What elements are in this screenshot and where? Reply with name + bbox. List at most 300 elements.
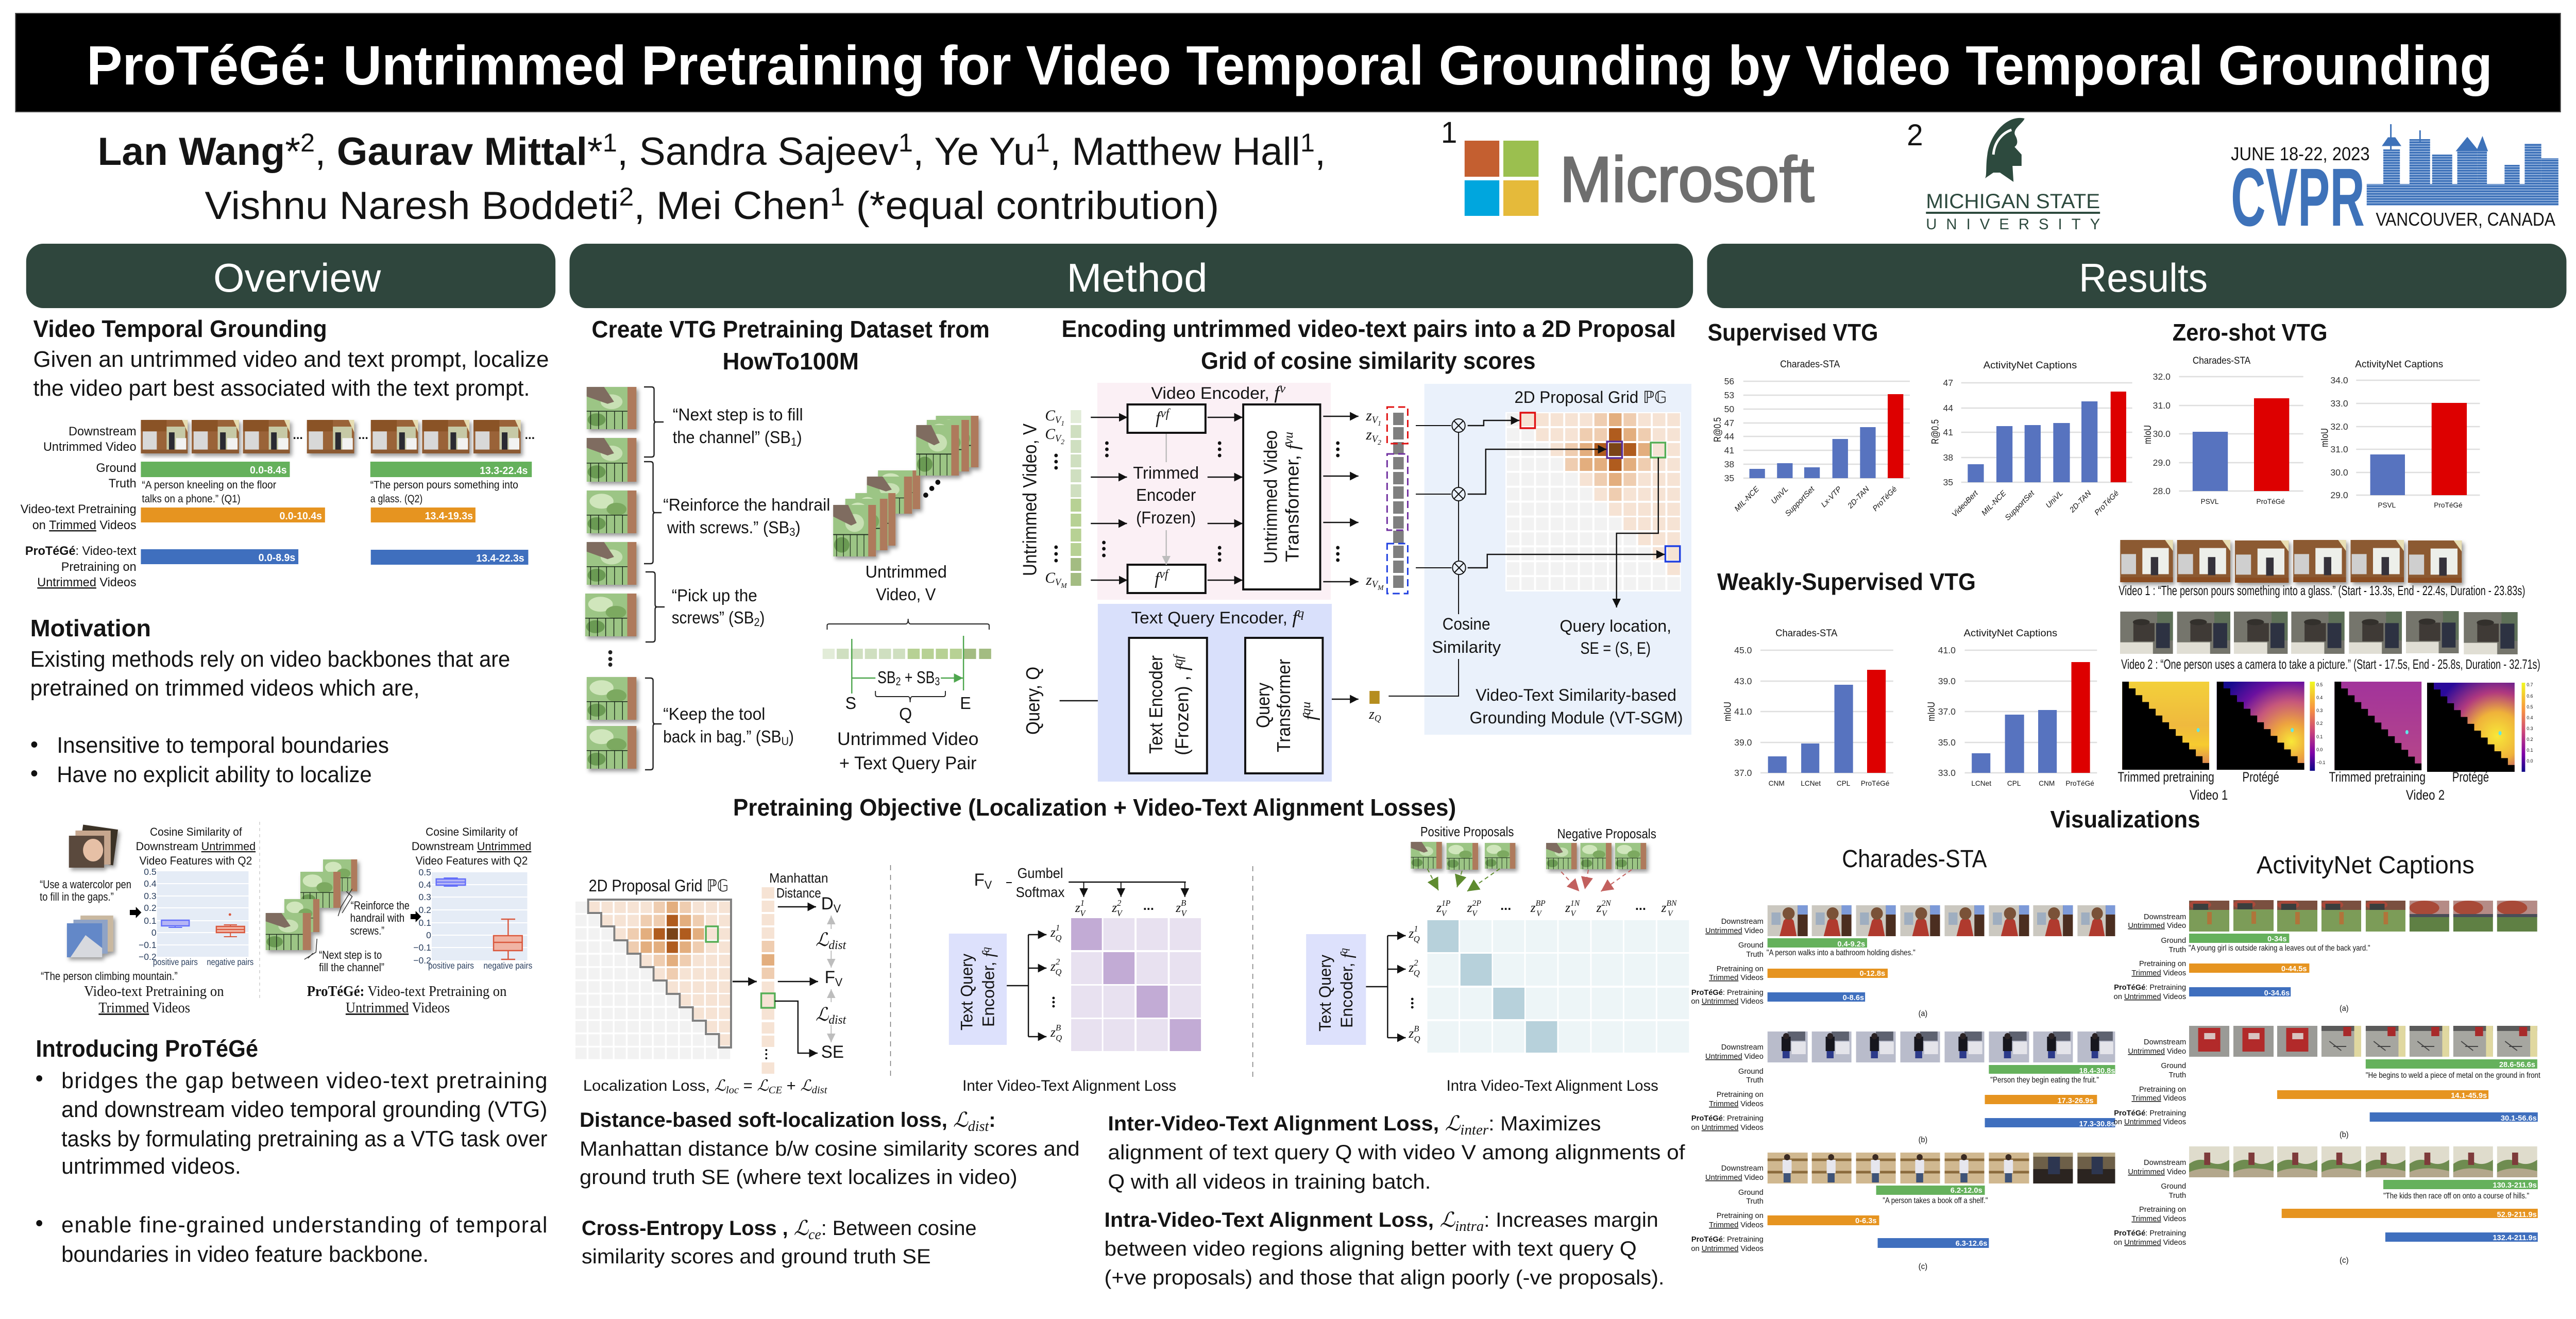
chart: supervised activitynet: R@0.5 <box>1930 419 1941 444</box>
figure: intra video-text alignment: 2P <box>1472 899 1481 908</box>
video features column: V <box>1372 415 1379 426</box>
figure: grounding example: Video-text Pretraining <box>21 503 137 516</box>
panel: results <box>1691 319 2540 1271</box>
text: intra loss: intra <box>1455 1218 1484 1234</box>
input: query: Query, Q <box>1022 667 1043 735</box>
figure: protege pretraining cosine similarity: 0.2 <box>418 905 431 915</box>
figure: intra video-text alignment: V <box>1571 909 1577 918</box>
visualization: charades c: Trimmed Videos <box>1709 1221 1764 1229</box>
logo: Microsoft <box>1441 116 1814 216</box>
figure: protege pretraining cosine similarity: 0 <box>426 930 431 940</box>
captions: step sentences: 2 <box>754 616 760 629</box>
chart: heatmaps: 0.3 <box>2527 726 2533 731</box>
chart: zero-shot activitynet: 31.0 <box>2330 444 2348 454</box>
figure: protege pretraining cosine similarity: handrail with <box>350 911 404 924</box>
figure: localization loss: V <box>834 902 841 915</box>
chart: zero-shot charades: 28.0 <box>2153 486 2171 496</box>
figure: inter video-text alignment: z <box>1050 1025 1056 1040</box>
logo: Michigan State University <box>1907 118 2100 233</box>
figure: inter video-text alignment: 1 <box>1056 923 1060 933</box>
chart: zero-shot charades: 31.0 <box>2153 400 2171 411</box>
start-end span: S <box>845 694 856 713</box>
visualization: activitynet a: Pretraining on <box>2139 960 2186 968</box>
text: vtg description <box>33 347 549 401</box>
panel: text query encoder: Text Query Encoder, f <box>1131 607 1297 628</box>
visualization: charades c: Downstream <box>1721 1164 1764 1173</box>
figure: grounding example: Truth <box>109 477 137 491</box>
logo: Michigan State University: 2 <box>1907 119 1923 152</box>
chart: weakly-supervised activitynet: 35.0 <box>1938 737 1956 748</box>
chart: supervised activitynet: 41 <box>1943 427 1953 437</box>
panel: video encoder: vu <box>1281 432 1296 445</box>
figure: intra video-text alignment: z <box>1597 900 1602 915</box>
visualization: charades c: 6.2-12.0s <box>1951 1187 1982 1195</box>
start-end span: + Text Query Pair <box>839 754 977 773</box>
visualization: charades a: ProTéGé: Pretraining <box>1691 989 1764 997</box>
untrimmed video frame stacks <box>833 416 978 556</box>
visualization: charades b: Ground <box>1738 1068 1764 1076</box>
figure: intra video-text alignment: 1P <box>1442 899 1451 908</box>
video features column: 2 <box>1378 438 1381 446</box>
figure: inter video-text alignment: Inter Video-Text Alignment Loss <box>962 1077 1176 1094</box>
visualization: charades a: Trimmed Videos <box>1709 974 1764 982</box>
start-end span: 2 <box>896 675 901 688</box>
figure: inter video-text alignment: B <box>1181 898 1186 908</box>
label: untrimmed video: Video, V <box>876 585 936 604</box>
heading: create dataset: Create VTG Pretraining Dataset from <box>591 316 990 343</box>
clip strip <box>823 649 991 659</box>
figure: inter video-text alignment: Q <box>1055 967 1061 977</box>
chart: supervised charades: 50 <box>1724 404 1734 414</box>
authors: Gaurav Mittal* <box>337 129 602 173</box>
figure: protege pretraining cosine similarity: −0.2 <box>413 955 431 966</box>
chart: supervised activitynet: 38 <box>1943 452 1953 463</box>
panel: VT-SGM: Grounding Module (VT-SGM) <box>1470 708 1683 727</box>
figure: protege pretraining cosine similarity: fill the channel” <box>319 961 384 974</box>
authors: , <box>1315 129 1326 173</box>
text: motivation: pretrained on trimmed videos which are, <box>30 676 419 701</box>
figure: inter video-text alignment: z <box>1050 925 1056 940</box>
start-end span: 3 <box>935 675 940 688</box>
figure: protege pretraining cosine similarity: positive pairs <box>428 960 474 971</box>
figure: intra video-text alignment: 2N <box>1602 899 1612 908</box>
figure: grounding example: ... <box>525 429 535 442</box>
chart: weakly-supervised charades: Charades-STA <box>1775 628 1838 638</box>
chart: heatmaps: 0.5 <box>2527 704 2533 709</box>
figure: intra video-text alignment: Negative Proposals <box>1557 827 1656 841</box>
text: inter loss <box>1108 1112 1686 1193</box>
video features column <box>1365 407 1408 594</box>
panel: VT-SGM: Query location, <box>1560 617 1671 635</box>
chart: zero-shot activitynet: mIoU <box>2319 428 2330 447</box>
figure: grounding example: 13.3-22.4s <box>480 465 528 477</box>
figure: intra video-text alignment: Q <box>1414 968 1420 978</box>
figure: localization loss: Localization Loss, ℒ <box>583 1077 725 1094</box>
text: intra loss: Intra-Video-Text Alignment Loss, ℒ <box>1105 1209 1454 1231</box>
chart: heatmaps: Trimmed pretraining <box>2117 769 2214 785</box>
chart: supervised activitynet: 44 <box>1943 403 1953 413</box>
figure: localization loss: loc <box>726 1085 739 1096</box>
chart: weakly-supervised charades: CNM <box>1769 779 1785 787</box>
text: vtg description: Given an untrimmed video and text prompt, localize <box>33 347 549 372</box>
chart: heatmaps: 0.2 <box>2316 721 2323 726</box>
figure: intra video-text alignment <box>1306 825 1689 1094</box>
text: cross-entropy loss: ce <box>808 1226 821 1242</box>
authors: , Mei Chen <box>634 183 830 227</box>
figure: intra video-text alignment: z <box>1409 926 1414 941</box>
figure: intra video-text alignment: Text Query <box>1315 954 1334 1031</box>
visualization: activitynet a: Truth <box>2169 946 2186 954</box>
visualization: activitynet b: ProTéGé: Pretraining <box>2114 1109 2186 1118</box>
visualization: charades b: "Person they begin eating the fruit." <box>1990 1076 2099 1085</box>
header: Overview <box>26 244 555 308</box>
figure: trimmed pretraining cosine similarity: 0.2 <box>144 903 157 913</box>
visualization: activitynet c: (c) <box>2340 1256 2349 1265</box>
authors <box>97 128 1326 227</box>
query feature <box>1368 691 1381 723</box>
text: inter loss: Inter-Video-Text Alignment Loss, ℒ <box>1108 1112 1460 1135</box>
visualization: charades a: Ground <box>1738 941 1764 950</box>
panel: text query encoder: (Frozen) , f <box>1172 665 1193 755</box>
visualization: activitynet a: 0-44.5s <box>2281 965 2307 973</box>
panel: overview <box>21 316 549 1267</box>
chart: weakly-supervised activitynet: 33.0 <box>1938 768 1956 778</box>
visualization: charades c: ProTéGé: Pretraining <box>1691 1236 1764 1244</box>
authors: Lan Wang* <box>97 129 300 173</box>
visualization: activitynet b: Ground <box>2161 1062 2186 1070</box>
chart: zero-shot activitynet: 33.0 <box>2330 398 2348 409</box>
chart: supervised charades: 2D-TAN <box>1846 485 1871 511</box>
figure: grounding example: Untrimmed Videos <box>37 576 137 589</box>
visualization: activitynet b: "He begins to weld a piece of metal on the ground in front <box>2366 1071 2540 1080</box>
panel: video encoder: Trimmed <box>1133 463 1199 482</box>
arrows: encoder flow <box>1060 416 1359 701</box>
chart: supervised charades: Lx-VTP <box>1820 485 1843 509</box>
visualization: activitynet b: on Untrimmed Videos <box>2114 1118 2186 1126</box>
chart: weakly-supervised charades: 37.0 <box>1734 768 1752 778</box>
text: intra loss: (+ve proposals) and those that align poorly (-ve proposals). <box>1105 1266 1664 1289</box>
visualization: charades c: on Untrimmed Videos <box>1691 1245 1764 1253</box>
chart: weakly-supervised charades: mIoU <box>1722 702 1733 721</box>
chart: heatmaps: Video 1 <box>2190 787 2228 803</box>
video features column: V <box>1372 434 1379 445</box>
visualization: charades b: Truth <box>1746 1076 1764 1085</box>
chart: supervised charades: 41 <box>1724 445 1734 455</box>
figure: intra video-text alignment: BP <box>1536 899 1546 908</box>
figure: protege pretraining cosine similarity <box>266 825 532 1016</box>
chart: zero-shot charades: mIoU <box>2142 425 2154 444</box>
figure: intra video-text alignment: V <box>1602 909 1608 918</box>
chart: zero-shot charades <box>2142 355 2303 505</box>
figure: intra video-text alignment: Intra Video-Text Alignment Loss <box>1447 1077 1658 1094</box>
authors: , Matthew Hall <box>1050 129 1300 173</box>
video features column: z <box>1366 572 1372 588</box>
visualization: activitynet b: Truth <box>2169 1071 2186 1079</box>
text: introducing protege bullets: and downstream video temporal grounding (VTG) <box>61 1097 547 1122</box>
visualization: activitynet b: Trimmed Videos <box>2131 1094 2186 1103</box>
chart: supervised activitynet: UniVL <box>2044 489 2065 510</box>
logo: CVPR 2023: CVPR <box>2231 151 2365 243</box>
header: Overview: Overview <box>213 256 381 300</box>
figure: localization loss: F <box>825 968 835 987</box>
chart: zero-shot charades: 30.0 <box>2153 429 2171 439</box>
visualization: activitynet a: ProTéGé: Pretraining <box>2114 984 2186 992</box>
figure: protege pretraining cosine similarity: ProTéGé: Video-text Pretraining on <box>307 983 507 999</box>
figure: trimmed pretraining cosine similarity: 0.1 <box>144 916 157 926</box>
captions: step sentences: ) <box>796 428 802 447</box>
logo: CVPR 2023: JUNE 18-22, 2023 <box>2231 144 2370 164</box>
chart: supervised charades: 44 <box>1724 431 1734 442</box>
heading: charades-sta: Charades-STA <box>1842 845 1987 873</box>
figure: protege pretraining cosine similarity: Cosine Similarity of <box>426 825 518 838</box>
chart: heatmaps: 0.0 <box>2527 758 2533 764</box>
chart: heatmaps: Protégé <box>2452 769 2489 785</box>
figure: inter video-text alignment: Encoder, f <box>979 952 998 1027</box>
chart: zero-shot activitynet: 34.0 <box>2330 375 2348 385</box>
captions: step sentences <box>663 405 830 748</box>
text: motivation: Existing methods rely on video backbones that are <box>30 647 510 672</box>
figure: grounding example: 13.4-22.3s <box>476 553 524 564</box>
figure: protege pretraining cosine similarity: “Reinforce the <box>351 899 410 912</box>
chart: zero-shot activitynet: ProTéGé <box>2434 501 2463 509</box>
video features column: V <box>1372 579 1379 590</box>
visualization: activitynet c: 130.3-211.9s <box>2493 1181 2537 1190</box>
header: Method <box>569 244 1693 308</box>
heading: weakly-supervised VTG: Weakly-Supervised VTG <box>1717 569 1976 595</box>
figure: grounding example: 0.0-8.9s <box>259 552 295 564</box>
figure: inter video-text alignment: 2 <box>1056 957 1060 967</box>
text: inter loss: : Maximizes <box>1488 1112 1601 1135</box>
chart: supervised charades: 47 <box>1724 418 1734 428</box>
heading: zero-shot VTG: Zero-shot VTG <box>2173 319 2328 346</box>
figure: inter video-text alignment: F <box>974 871 985 890</box>
visualization: charades c: "A person takes a book off a shelf." <box>1883 1196 1988 1205</box>
header: Method: Method <box>1066 256 1208 300</box>
input: untrimmed video clips: C <box>1045 408 1055 424</box>
input: untrimmed video clips <box>1019 408 1081 589</box>
figure: trimmed pretraining cosine similarity: −0.2 <box>139 952 157 962</box>
figure: protege pretraining cosine similarity: “Next step is to <box>319 949 382 961</box>
chart: zero-shot charades: ProTéGé <box>2257 497 2285 505</box>
panel: pretraining objective <box>574 794 1689 1289</box>
video features column: 1 <box>1378 419 1381 427</box>
visualization: activitynet a: 0-34s <box>2267 935 2286 943</box>
chart: supervised charades: Charades-STA <box>1780 359 1840 369</box>
chart: zero-shot activitynet: ActivityNet Captions <box>2355 359 2443 369</box>
text: distance loss: : <box>989 1109 996 1131</box>
text: distance loss: dist <box>968 1118 990 1134</box>
visualization: activitynet a: (a) <box>2340 1004 2349 1013</box>
chart: supervised activitynet <box>1930 360 2132 522</box>
visualization: activitynet b <box>2114 1026 2540 1139</box>
panel: VT-SGM: Similarity <box>1432 638 1501 656</box>
captions: step sentences: U <box>782 735 789 748</box>
figure: intra video-text alignment: Q <box>1414 1034 1420 1044</box>
panel: text query encoder: f <box>1299 715 1320 720</box>
panel: VT-SGM: SE = (S, E) <box>1580 639 1651 657</box>
input: untrimmed video clips: 2 <box>1061 438 1064 446</box>
panel: video encoder: f <box>1156 409 1160 428</box>
visualization: charades c: 6.3-12.6s <box>1956 1240 1987 1248</box>
figure: localization loss: Manhattan <box>769 871 828 886</box>
text: intra loss: between video regions aligning better with text query Q <box>1105 1238 1637 1260</box>
figure: localization loss: dist <box>828 939 847 952</box>
chart: supervised activitynet: SupportSet <box>2004 489 2037 522</box>
figure: intra video-text alignment: z <box>1531 900 1536 915</box>
chart: weakly-supervised charades: 45.0 <box>1734 645 1752 655</box>
visualization: charades c: Untrimmed Video <box>1705 1174 1764 1182</box>
figure: grounding example: “A person kneeling on the floor <box>142 479 276 491</box>
panel: VT-SGM: Video-Text Similarity-based <box>1476 686 1676 704</box>
figure: localization loss: + <box>782 1077 800 1094</box>
figure: localization loss: ℒ <box>816 929 828 950</box>
panel: encoding untrimmed video-text pairs <box>1019 316 1691 782</box>
figure: intra video-text alignment: Q <box>1414 934 1420 944</box>
authors: , <box>315 129 337 173</box>
start-end span: + SB <box>901 668 935 687</box>
chart: supervised charades: MIL-NCE <box>1733 485 1761 513</box>
figure: grounding example: Downstream <box>69 425 137 438</box>
visualization: activitynet c: Pretraining on <box>2139 1206 2186 1214</box>
text: inter loss: Q with all videos in training batch. <box>1108 1171 1431 1193</box>
input: untrimmed video clips: V <box>1055 433 1062 444</box>
panel: text query encoder: Transformer <box>1273 659 1294 752</box>
text: inter loss: inter <box>1460 1122 1488 1138</box>
figure: localization loss: ℒ <box>757 1078 769 1094</box>
chart: heatmaps: Protégé <box>2243 769 2279 785</box>
visualization: charades c: Truth <box>1746 1197 1764 1206</box>
visualization: charades a: 0.4-9.2s <box>1837 940 1865 949</box>
chart: zero-shot activitynet: PSVL <box>2378 501 2396 509</box>
logo: CVPR 2023 <box>2231 124 2558 243</box>
figure: inter video-text alignment: z <box>1050 959 1056 974</box>
chart: heatmaps: Video 2 <box>2406 787 2445 803</box>
captions: step sentences: 3 <box>789 526 795 538</box>
panel: video encoder: v <box>1280 382 1286 396</box>
figure: intra video-text alignment: z <box>1565 900 1570 915</box>
figure: intra video-text alignment: V <box>1472 909 1478 918</box>
chart: supervised activitynet: VideoBert <box>1951 489 1980 519</box>
visualization: charades b: on Untrimmed Videos <box>1691 1124 1764 1132</box>
figure: protege pretraining cosine similarity: negative pairs <box>483 960 532 971</box>
visualization: activitynet c: ProTéGé: Pretraining <box>2114 1229 2186 1238</box>
figure: protege pretraining cosine similarity: screws.” <box>350 924 384 937</box>
heading: supervised VTG: Supervised VTG <box>1707 319 1878 346</box>
visualization: activitynet c: 132.4-211.9s <box>2493 1234 2537 1242</box>
figure: inter video-text alignment: 1 <box>1080 898 1084 908</box>
figure: inter video-text alignment: q <box>979 947 992 953</box>
visualization: activitynet b: Untrimmed Video <box>2128 1047 2186 1056</box>
authors: 1 <box>603 128 617 157</box>
panel: text query encoder: Query <box>1252 682 1274 728</box>
heading: video temporal grounding: Video Temporal Grounding <box>33 316 327 342</box>
text: vtg description: the video part best associated with the text prompt. <box>33 376 530 401</box>
input: untrimmed video clips: V <box>1055 577 1062 588</box>
figure: trimmed pretraining cosine similarity: 0.3 <box>144 891 157 901</box>
figure: intra video-text alignment: q <box>1337 948 1350 954</box>
panel: video encoder: Transformer, f <box>1282 444 1302 562</box>
figure: inter video-text alignment: z <box>1176 900 1181 915</box>
figure: inter video-text alignment: Q <box>1056 1033 1062 1043</box>
figure: trimmed pretraining cosine similarity: to fill in the gaps.” <box>40 890 114 903</box>
authors: 2 <box>619 182 634 211</box>
figure: trimmed pretraining cosine similarity: negative pairs <box>207 957 253 967</box>
figure: trimmed pretraining cosine similarity: Downstream Untrimmed <box>136 840 256 853</box>
text: distance loss: Distance-based soft-localization loss, ℒ <box>580 1109 968 1131</box>
visualization: activitynet c: "The kids then race off on onto a course of hills." <box>2383 1192 2529 1200</box>
logo: Michigan State University: MICHIGAN STATE <box>1926 190 2100 213</box>
chart: heatmaps: 0.4 <box>2316 695 2323 700</box>
input: untrimmed video clips: C <box>1045 570 1055 586</box>
figure: trimmed pretraining cosine similarity: positive pairs <box>153 957 198 967</box>
chart: supervised charades: 56 <box>1724 376 1734 386</box>
chart: weakly-supervised activitynet: mIoU <box>1926 702 1937 721</box>
figure: trimmed pretraining cosine similarity: Cosine Similarity of <box>150 825 243 838</box>
figure: inter video-text alignment: Q <box>1055 933 1061 943</box>
logo: Michigan State University: UNIVERSITY <box>1926 216 2100 233</box>
heading: motivation: Motivation <box>30 615 151 641</box>
visualization: activitynet c: on Untrimmed Videos <box>2114 1239 2186 1247</box>
header: Results: Results <box>2079 256 2208 300</box>
chart: heatmaps: 0.2 <box>2527 737 2533 742</box>
figure: intra video-text alignment: z <box>1662 900 1666 915</box>
figure: localization loss: SE <box>821 1043 844 1062</box>
video features column: z <box>1366 408 1372 424</box>
chart: weakly-supervised charades: 41.0 <box>1734 706 1752 717</box>
figure: inter video-text alignment: z <box>1112 900 1117 915</box>
figure: grounding example: 13.4-19.3s <box>425 511 473 522</box>
query feature: z <box>1369 706 1375 722</box>
panel: video encoder: vf <box>1160 407 1171 420</box>
captions: step sentences: ) <box>760 608 765 627</box>
chart: zero-shot activitynet: 29.0 <box>2330 490 2348 500</box>
panel: text query encoder: qf <box>1171 653 1185 666</box>
figure: heatmap video 1 frames <box>2119 540 2525 598</box>
figure: inter video-text alignment: Text Query <box>957 953 976 1030</box>
chart: supervised activitynet: ProTéGé <box>2093 489 2121 517</box>
panel: video encoder: f <box>1155 569 1159 588</box>
chart: heatmaps: 0.4 <box>2527 715 2533 720</box>
visualization: charades a: Pretraining on <box>1717 965 1764 973</box>
figure: localization loss: CE <box>769 1085 782 1096</box>
authors: (*equal contribution) <box>845 183 1219 227</box>
heading: create dataset <box>591 316 990 375</box>
visualization: charades b <box>1691 1031 2115 1144</box>
captions: step sentences: the channel” (SB <box>673 428 796 447</box>
figure: intra video-text alignment: z <box>1409 1026 1414 1041</box>
video features column: z <box>1366 427 1372 443</box>
visualization: activitynet a: Trimmed Videos <box>2131 969 2186 977</box>
text: motivation: Have no explicit ability to localize <box>57 763 372 787</box>
text: introducing protege bullets: bridges the gap between video-text pretraining <box>61 1069 547 1093</box>
figure: localization loss: dist <box>812 1085 827 1096</box>
chart: heatmaps: 0.1 <box>2527 748 2533 753</box>
logo: CVPR 2023: VANCOUVER, CANADA <box>2376 209 2555 230</box>
title bar <box>15 13 2561 112</box>
visualization: activitynet a: Downstream <box>2144 913 2186 921</box>
chart: weakly-supervised charades: 43.0 <box>1734 676 1752 686</box>
visualization: activitynet c: Ground <box>2161 1182 2186 1191</box>
panel: text query encoder: Text Encoder <box>1145 655 1166 754</box>
figure: grounding example <box>21 420 535 589</box>
figure: trimmed pretraining cosine similarity: 0 <box>151 927 157 938</box>
panel: video encoder: Video Encoder, f <box>1151 382 1279 403</box>
text: distance loss: Manhattan distance b/w cosine similarity scores and <box>580 1138 1080 1160</box>
visualization: charades c: (c) <box>1919 1262 1927 1271</box>
text: distance loss: ground truth SE (where text localizes in video) <box>580 1166 1018 1189</box>
visualization: activitynet c: Downstream <box>2144 1159 2186 1167</box>
figure: inter video-text alignment: Gumbel <box>1018 865 1063 881</box>
